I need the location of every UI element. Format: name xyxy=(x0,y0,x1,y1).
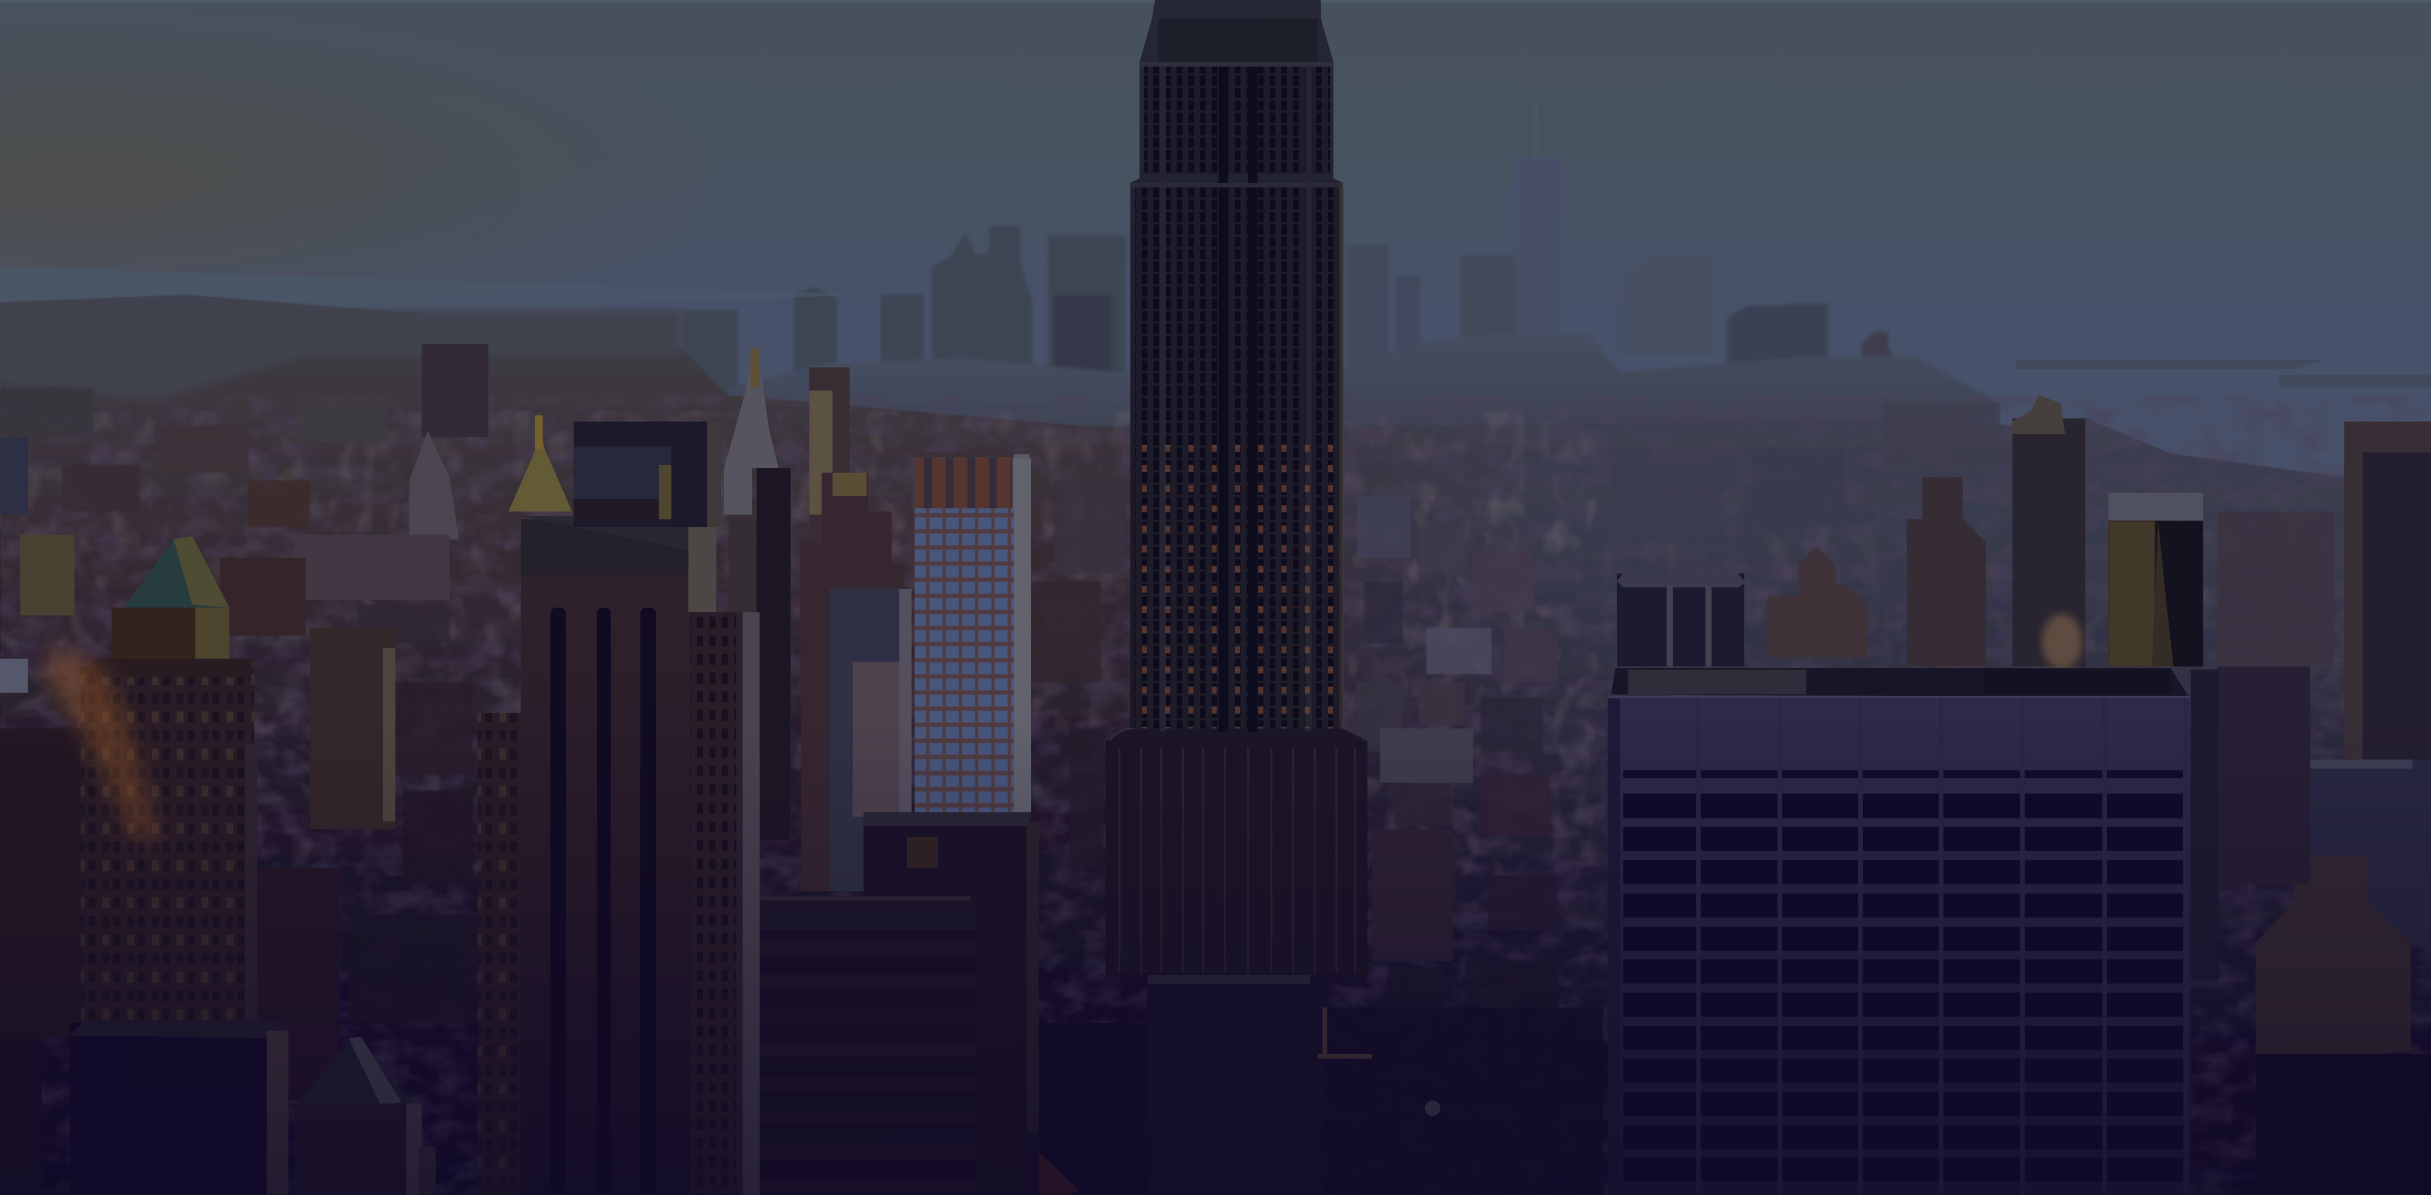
foreground pyramid-roof block xyxy=(295,1037,436,1195)
dark building under blue tower xyxy=(864,812,1039,1195)
window rows xyxy=(1623,794,2183,1182)
sky xyxy=(0,0,2431,527)
gold pyramid roof xyxy=(509,411,572,511)
dark building with rooftop structure xyxy=(574,422,721,527)
midground buildings left xyxy=(0,344,488,1195)
midground buildings right xyxy=(1372,395,2431,1195)
rooftops below Empire State xyxy=(1017,975,1603,1195)
mullions xyxy=(1698,697,2186,1195)
curved building xyxy=(760,896,1023,1195)
tower with white spire xyxy=(724,344,791,840)
large foreground office block xyxy=(1608,668,2219,1195)
lens flare xyxy=(47,650,161,845)
left clock tower xyxy=(0,536,257,1038)
art deco tower with stripes xyxy=(478,516,760,1195)
tower behind with gold facade xyxy=(800,367,912,891)
roof xyxy=(1611,668,2189,697)
small midground blocks xyxy=(0,387,2333,1023)
far river and waterfront xyxy=(0,267,2431,409)
midground city fabric xyxy=(0,294,2431,1195)
distant skyline xyxy=(682,101,2000,498)
steam plume xyxy=(2042,614,2082,670)
blue glass tower xyxy=(915,453,1031,814)
Empire State Building xyxy=(1105,0,1367,976)
foreground dark block left xyxy=(70,1020,288,1195)
top dark band xyxy=(1623,770,2183,778)
facade xyxy=(1608,697,2191,1195)
